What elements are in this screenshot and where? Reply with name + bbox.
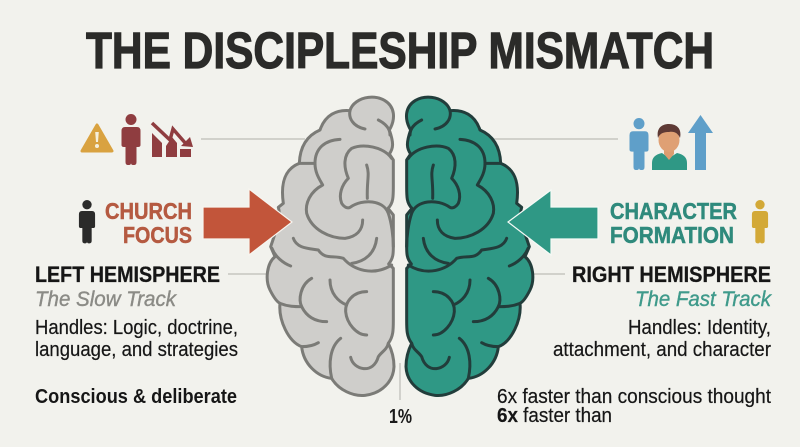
text block: right hemisphere: attachment, and character xyxy=(553,339,771,361)
icon: up arrow xyxy=(688,115,713,170)
label: one percent: 1% xyxy=(389,406,412,428)
text block: right hemisphere: The Fast Track xyxy=(635,288,772,311)
icon: declining bar chart xyxy=(152,123,193,157)
text block: right hemisphere: 6x faster than xyxy=(497,405,612,427)
label: character formation xyxy=(610,198,737,248)
label: church focus: FOCUS xyxy=(123,222,192,248)
label: church focus: CHURCH xyxy=(105,198,192,224)
text block: left hemisphere xyxy=(35,262,238,408)
text block: right hemisphere: 6x faster than conscious thought xyxy=(497,386,771,408)
icon: gold person xyxy=(752,200,768,243)
label: character formation: FORMATION xyxy=(610,222,734,248)
icon: black person xyxy=(79,200,95,243)
text block: left hemisphere: Conscious & deliberate xyxy=(35,386,237,408)
icon: avatar xyxy=(652,124,687,170)
icon: blue person xyxy=(630,118,648,170)
icon: warning triangle xyxy=(82,125,112,151)
text block: left hemisphere: The Slow Track xyxy=(35,288,177,311)
text block: right hemisphere xyxy=(497,262,772,427)
text block: left hemisphere: language, and strategies xyxy=(35,339,238,361)
arrow: character formation pointing left xyxy=(508,190,598,255)
text block: left hemisphere: LEFT HEMISPHERE xyxy=(35,262,220,287)
text block: left hemisphere: Handles: Logic, doctrine, xyxy=(35,317,238,339)
arrow: church focus pointing right xyxy=(203,189,292,255)
brain: right hemisphere xyxy=(406,97,533,395)
label: church focus xyxy=(105,198,192,248)
label: character formation: CHARACTER xyxy=(610,198,737,224)
text block: right hemisphere: Handles: Identity, xyxy=(628,317,771,339)
brain: left hemisphere xyxy=(267,97,394,395)
icon: dark red person xyxy=(122,114,140,165)
text block: right hemisphere: RIGHT HEMISPHERE xyxy=(572,262,771,287)
